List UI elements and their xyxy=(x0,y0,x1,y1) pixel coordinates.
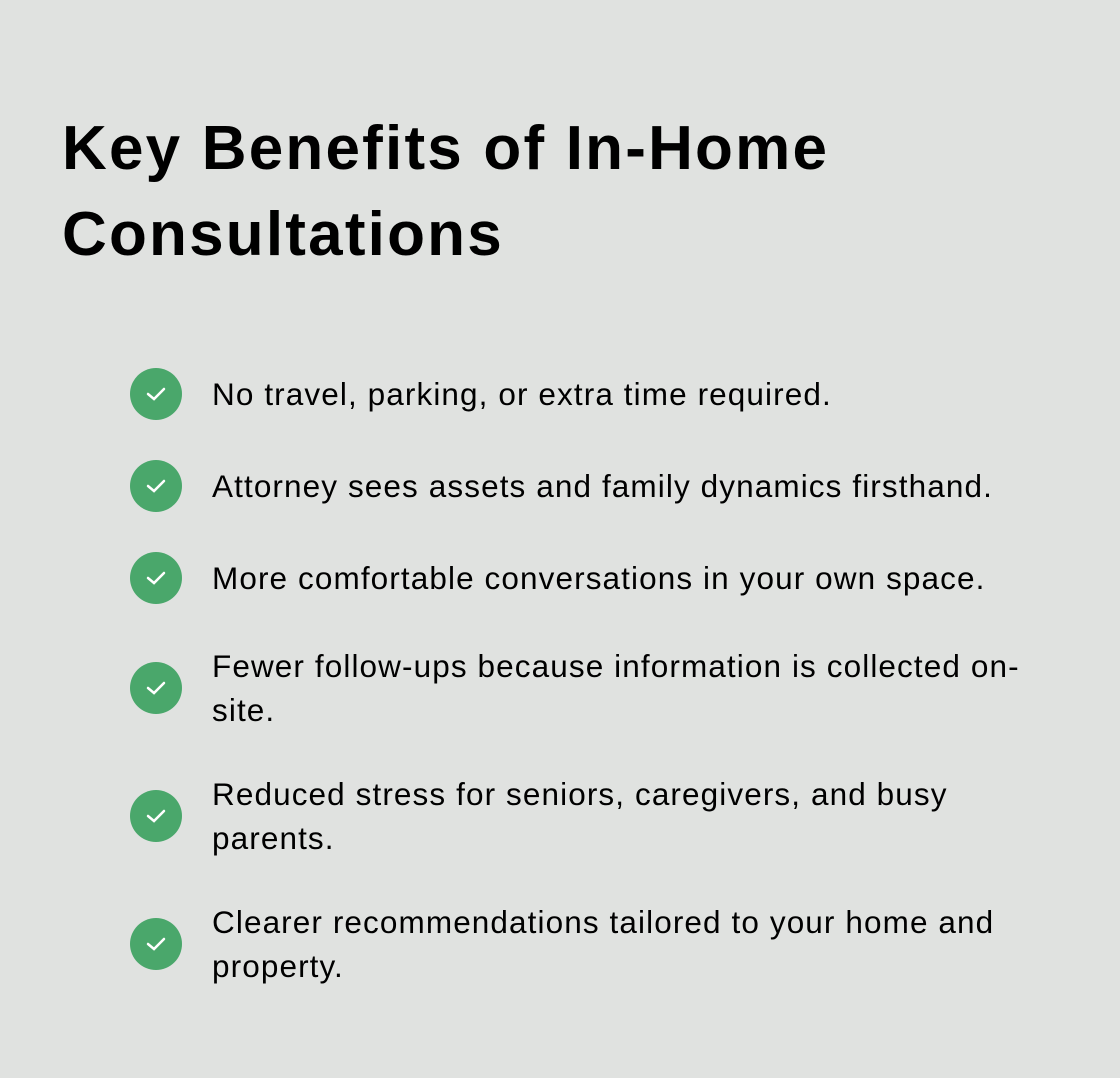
text xyxy=(212,904,994,984)
text: Reduced stress for seniors, caregivers, and busy xyxy=(212,776,948,812)
list item 5 xyxy=(130,776,948,856)
text: parents. xyxy=(212,820,335,856)
icon: check xyxy=(130,460,182,512)
text: Attorney sees assets and family dynamics firsthand. xyxy=(212,468,993,504)
text: property. xyxy=(212,948,344,984)
list item 2 xyxy=(130,460,993,512)
text: site. xyxy=(212,692,275,728)
list item 3 xyxy=(130,552,986,604)
text: Clearer recommendations tailored to your home and xyxy=(212,904,994,940)
icon: check xyxy=(130,662,182,714)
title: Consultations xyxy=(62,200,504,269)
icon: check xyxy=(130,918,182,970)
text: More comfortable conversations in your own space. xyxy=(212,560,986,596)
title: Key Benefits of In-Home xyxy=(62,114,829,183)
list item 6 xyxy=(130,904,994,984)
icon: check xyxy=(130,552,182,604)
list item 4 xyxy=(130,648,1020,728)
text xyxy=(212,648,1020,728)
icon: check xyxy=(130,790,182,842)
text: No travel, parking, or extra time required. xyxy=(212,376,832,412)
list item 1 xyxy=(130,368,832,420)
text xyxy=(212,776,948,856)
icon: check xyxy=(130,368,182,420)
text: Fewer follow-ups because information is collected on- xyxy=(212,648,1020,684)
title xyxy=(62,114,829,269)
